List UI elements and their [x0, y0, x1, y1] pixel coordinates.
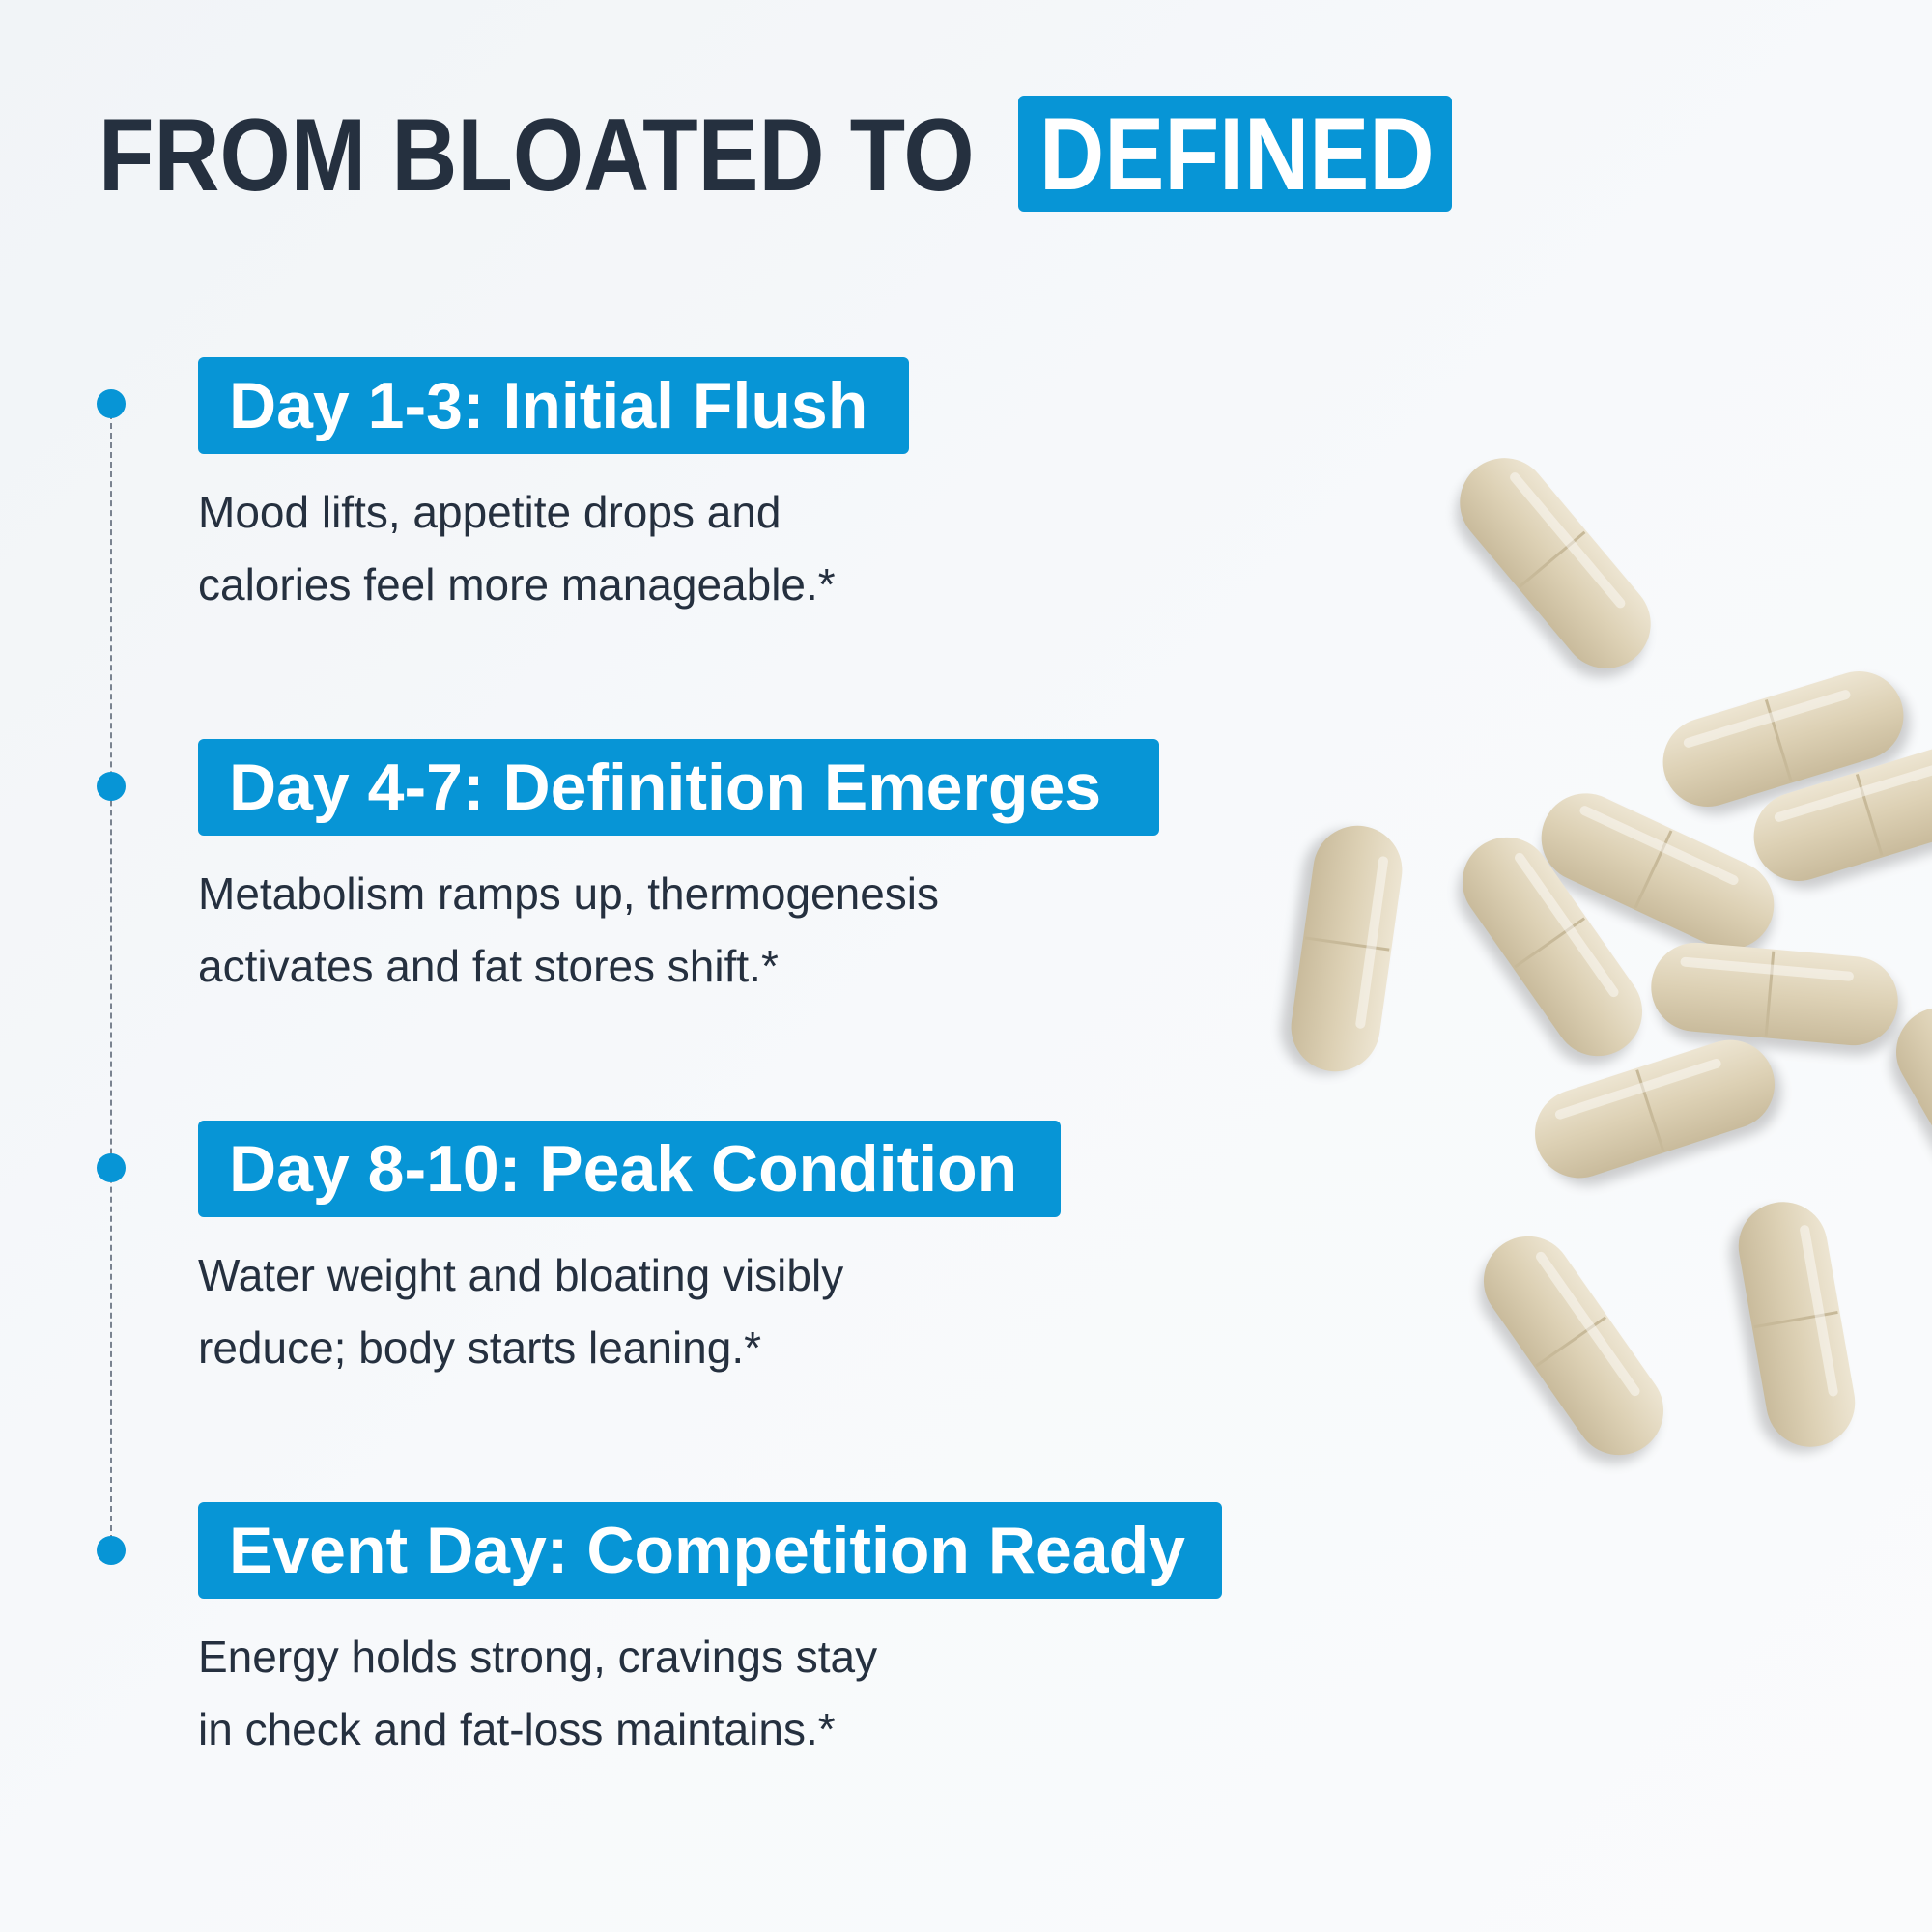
text 2	[198, 868, 939, 991]
dot 3	[97, 1153, 126, 1182]
heading 3: Day 8-10: Peak Condition	[229, 1132, 1017, 1206]
highlight text: DEFINED	[1039, 96, 1435, 212]
heading 2	[198, 739, 1159, 836]
dot 4	[97, 1536, 126, 1565]
text 1	[198, 487, 836, 610]
text 3	[198, 1250, 844, 1373]
heading 1: Day 1-3: Initial Flush	[229, 369, 867, 442]
text 1: Mood lifts, appetite drops and	[198, 487, 781, 537]
title	[99, 96, 1452, 213]
text 4	[198, 1632, 877, 1754]
dot 2	[97, 772, 126, 801]
timeline line	[110, 404, 112, 1550]
heading 3	[198, 1121, 1061, 1217]
text 3: reduce; body starts leaning.*	[198, 1322, 761, 1373]
text 4: Energy holds strong, cravings stay	[198, 1632, 877, 1682]
text 3: Water weight and bloating visibly	[198, 1250, 843, 1300]
capsule group	[1275, 440, 1932, 1481]
heading 2: Day 4-7: Definition Emerges	[229, 751, 1101, 824]
text 1: calories feel more manageable.*	[198, 559, 836, 610]
dot 1	[97, 389, 126, 418]
text 2: Metabolism ramps up, thermogenesis	[198, 868, 939, 919]
text 4: in check and fat-loss maintains.*	[198, 1704, 836, 1754]
text 2: activates and fat stores shift.*	[198, 941, 779, 991]
title highlight	[1018, 96, 1452, 212]
heading 4: Event Day: Competition Ready	[229, 1514, 1185, 1587]
title text: FROM BLOATED TO	[99, 97, 975, 213]
heading 1	[198, 357, 909, 454]
